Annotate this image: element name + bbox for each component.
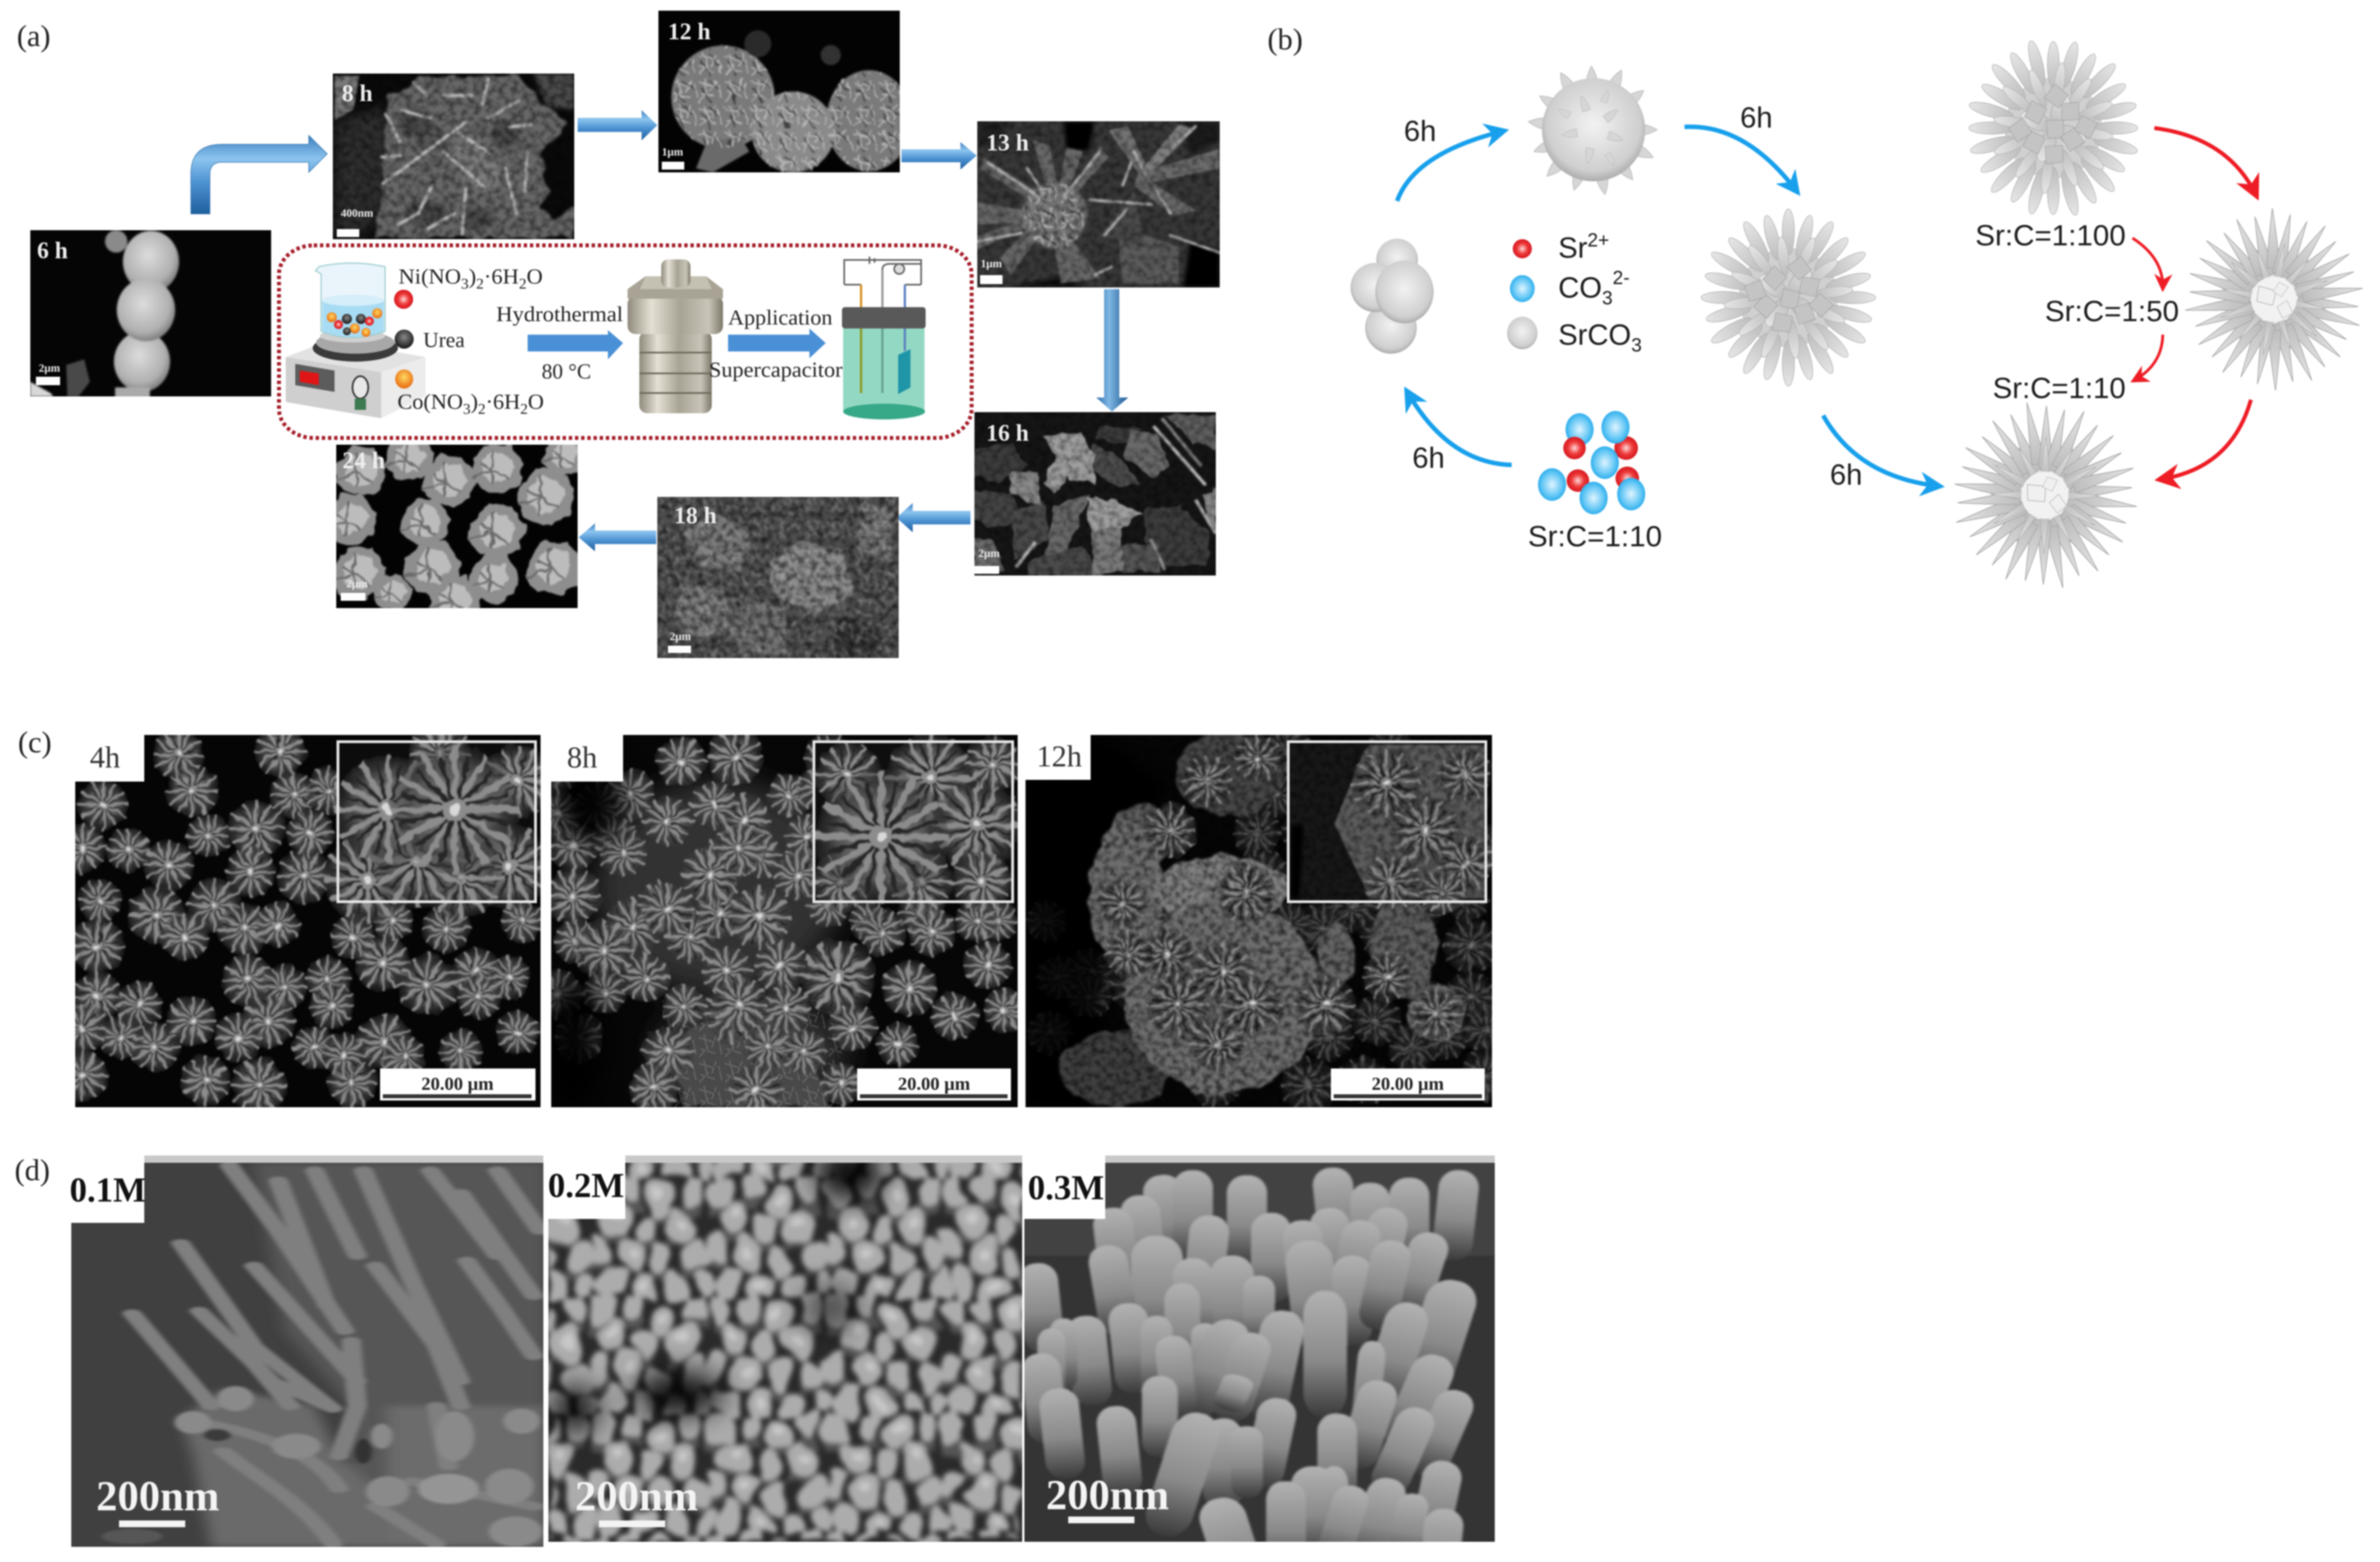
urchin: medium dense [1682, 191, 1895, 404]
scale bar 6 h [36, 362, 60, 385]
arrow: 16 h to 18 h [896, 503, 971, 532]
reagent: cobalt nitrate: O [528, 390, 544, 414]
scale bar 8h [857, 1068, 1011, 1100]
legend: CO [1558, 272, 1602, 304]
reagent: urea [395, 328, 465, 352]
time label 16 h: 16 h [986, 421, 1029, 446]
SEM image 6 h [30, 230, 271, 399]
reagent: nickel nitrate [394, 265, 543, 309]
label supercapacitor: Supercapacitor [709, 358, 843, 382]
panel label a: (a) [17, 19, 51, 53]
arrow: 13 h to 16 h [1096, 289, 1128, 412]
reagent: nickel nitrate: Ni(NO [399, 265, 458, 289]
legend: 3 [1602, 287, 1613, 309]
concentration label 0.2M: 0.2M [548, 1167, 624, 1205]
time labels 6h: 6h [1404, 115, 1436, 148]
SEM image 12h [1024, 725, 1512, 1113]
scale bar 18 h [668, 631, 691, 653]
ratio labels: Sr:C=1:50 [2045, 295, 2179, 328]
legend: 2+ [1587, 230, 1609, 251]
scale bar 4h: 20.00 μm [422, 1074, 493, 1094]
reagent: cobalt nitrate: ·6H [486, 390, 520, 414]
top strip 0.2M [625, 1155, 1022, 1163]
hot plate with beaker [286, 263, 425, 418]
time label 4h: 4h [90, 741, 120, 774]
scale bar 8 h [337, 207, 373, 237]
arrow: hydrothermal [528, 330, 623, 359]
reagent: nickel nitrate: 3 [461, 276, 469, 292]
SEM image 0.3M [1017, 1155, 1496, 1562]
label application: Application [728, 306, 832, 330]
concentration label 0.1M: 0.1M [70, 1171, 146, 1209]
concentration label 0.2M [548, 1155, 625, 1219]
time label 4h [75, 735, 144, 782]
scale bar 16 h [974, 547, 1000, 574]
ratio labels [1528, 220, 2179, 553]
legend [1507, 230, 1642, 356]
arrow: 18 h to 24 h [579, 523, 656, 551]
legend: Sr [1558, 232, 1587, 264]
synthesis scheme dotted box [279, 245, 972, 438]
SEM image 0.1M [70, 1155, 546, 1547]
SEM image 18 h [657, 497, 899, 658]
scale bar 8 h: 400nm [341, 207, 373, 220]
scale bar 24 h [341, 578, 368, 601]
time label 8h [551, 735, 623, 782]
SEM image 12 h [658, 11, 912, 172]
ratio labels: Sr:C=1:10 [1993, 372, 2126, 405]
reagent: cobalt nitrate: 2 [478, 401, 486, 417]
inset frame 4h [338, 742, 536, 902]
legend: 3 [1631, 335, 1642, 356]
arrow: 8 h to 12 h [578, 110, 657, 140]
time label 12 h: 12 h [668, 19, 711, 45]
time label 8 h: 8 h [342, 81, 373, 107]
scale label 0.3M: 200nm [1046, 1472, 1169, 1519]
SEM image 24 h [325, 435, 585, 625]
scale bar 24 h: 2μm [346, 578, 368, 590]
concentration label 0.3M [1024, 1155, 1105, 1219]
panel c: SEM time series [18, 721, 1512, 1117]
panel label d: (d) [15, 1153, 50, 1187]
scale bar 6 h: 2μm [39, 362, 60, 374]
scale bar 12 h: 1μm [662, 146, 683, 158]
panel a: time dependent morphology flow [17, 11, 1220, 658]
ratio labels: Sr:C=1:100 [1975, 220, 2126, 252]
scale bar 4h [380, 1068, 536, 1100]
inset frame 8h [814, 742, 1013, 902]
red arrows: ratio sequence [2132, 128, 2257, 479]
label temperature: 80 °C [542, 360, 591, 383]
arrow: 12 h to 13 h [901, 142, 977, 170]
panel b: SrCO3 growth cycle [1267, 22, 2370, 597]
time label 24 h: 24 h [342, 448, 385, 474]
scale bar 13 h [980, 258, 1003, 284]
reagent: cobalt nitrate: 3 [463, 401, 470, 417]
scale bar 12h [1331, 1068, 1485, 1100]
label hydrothermal: Hydrothermal [496, 303, 623, 326]
concentration label 0.1M [70, 1155, 146, 1223]
time label 13 h: 13 h [986, 130, 1029, 156]
reagent: cobalt nitrate: 2 [520, 401, 528, 417]
panel d: SEM concentration series [15, 1148, 1496, 1562]
SEM image 4h [56, 721, 555, 1113]
reagent: nickel nitrate: O [527, 265, 543, 289]
time label 12h: 12h [1036, 739, 1082, 773]
time label 12h [1026, 735, 1091, 780]
urchin: early stage [1527, 66, 1657, 196]
urchin: Sr:C 1:100 [1968, 39, 2139, 217]
SEM image 0.2M [548, 1148, 1022, 1542]
panel label c: (c) [18, 725, 52, 759]
reagent: cobalt nitrate [395, 369, 544, 417]
time label 6 h: 6 h [37, 238, 68, 264]
precursor ions [1538, 411, 1645, 514]
top strip 0.1M [144, 1155, 543, 1163]
top strip 0.3M [1105, 1155, 1495, 1163]
panel label b: (b) [1267, 22, 1303, 56]
time labels 6h: 6h [1412, 442, 1445, 474]
blue arrows: growth cycle [1397, 127, 1940, 486]
reagent: nickel nitrate: ) [469, 265, 476, 289]
SrCO3 aggregate [1351, 239, 1434, 354]
arrow: 6 h to 8 h [191, 135, 327, 214]
SEM image 8 h [333, 74, 574, 239]
reagent: nickel nitrate: 2 [519, 276, 527, 292]
ratio labels: Sr:C=1:10 [1528, 520, 1662, 553]
scale label 0.2M: 200nm [575, 1473, 698, 1520]
scale label 0.1M: 200nm [96, 1473, 219, 1520]
scale bar 8h: 20.00 μm [898, 1074, 970, 1094]
SEM image 16 h [974, 412, 1216, 576]
supercapacitor cell [842, 257, 926, 419]
reagent: cobalt nitrate: ) [470, 390, 478, 414]
reagent: nickel nitrate: 2 [476, 276, 484, 292]
SEM image 8h [532, 729, 1027, 1117]
scale bar 13 h: 1μm [981, 258, 1002, 270]
arrow: application [728, 328, 826, 358]
SEM image 13 h [977, 121, 1220, 287]
urchin: Sr:C 1:50 [2177, 200, 2370, 398]
concentration label 0.3M: 0.3M [1028, 1169, 1104, 1207]
scale bar 12h: 20.00 μm [1372, 1074, 1444, 1094]
legend: 2- [1613, 267, 1630, 289]
reagent: cobalt nitrate: Co(NO [397, 390, 460, 414]
scale bar 18 h: 2μm [670, 631, 691, 643]
reagent: nickel nitrate: ·6H [484, 265, 519, 289]
scale bar 16 h: 2μm [978, 547, 1000, 560]
legend: SrCO [1558, 319, 1631, 351]
reagent: urea: Urea [423, 328, 465, 352]
autoclave [628, 259, 723, 413]
time labels 6h: 6h [1740, 102, 1773, 134]
time label 8h: 8h [567, 741, 597, 774]
inset frame 12h [1288, 742, 1486, 902]
urchin: Sr:C 1:10 [1945, 393, 2145, 597]
time labels 6h: 6h [1830, 459, 1862, 491]
time labels 6h [1404, 102, 1862, 491]
scale bar 12 h [662, 146, 684, 170]
time label 18 h: 18 h [674, 503, 717, 529]
